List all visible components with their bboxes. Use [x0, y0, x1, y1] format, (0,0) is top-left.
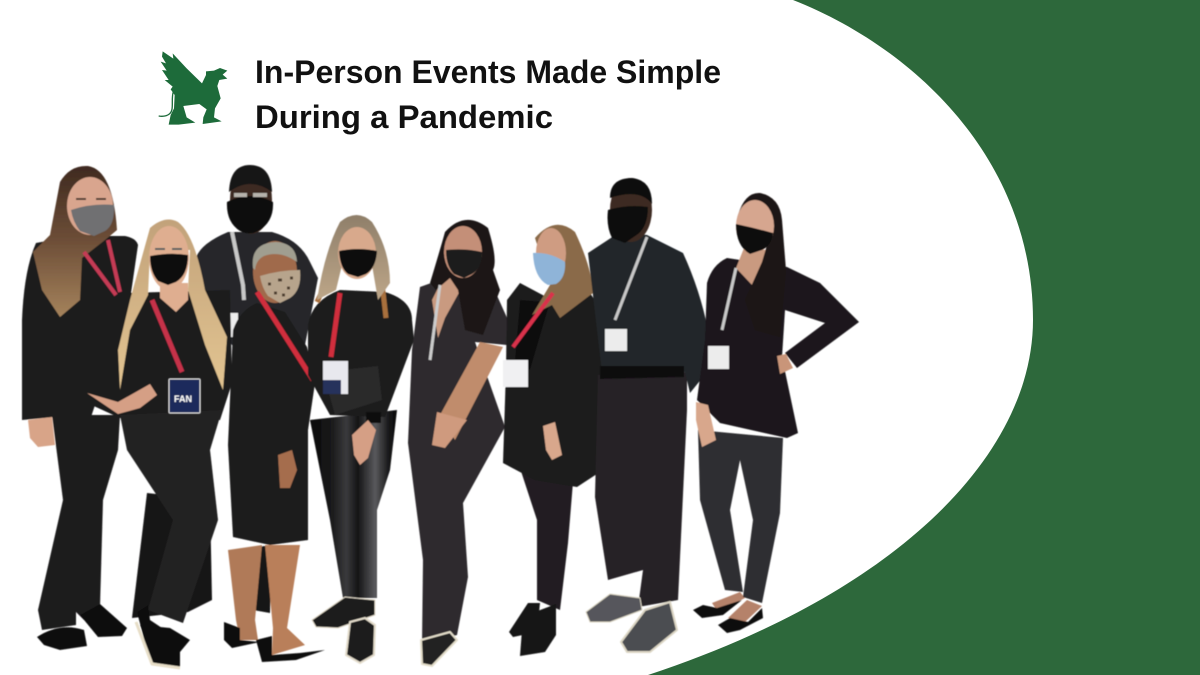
person: woman in black jumpsuit [408, 220, 508, 666]
person: woman in grey mask, far left [22, 166, 138, 650]
title [255, 54, 721, 135]
title: During a Pandemic [255, 99, 553, 135]
griffin logo [159, 51, 227, 125]
person: woman in leather pants [308, 215, 414, 663]
person: woman in blue mask [503, 225, 606, 656]
person: blonde woman with FAN badge [60, 220, 232, 668]
person: man with glasses, back row [195, 165, 318, 345]
person: woman on far right, hand on hip [693, 193, 859, 633]
title: In-Person Events Made Simple [255, 54, 721, 90]
person: woman with leopard mask [224, 241, 325, 662]
team group photo illustration [22, 165, 859, 668]
green curved panel [648, 0, 1200, 675]
person: man in dark shirt [586, 178, 708, 652]
person: blonde woman with FAN badge: FAN [174, 394, 192, 404]
